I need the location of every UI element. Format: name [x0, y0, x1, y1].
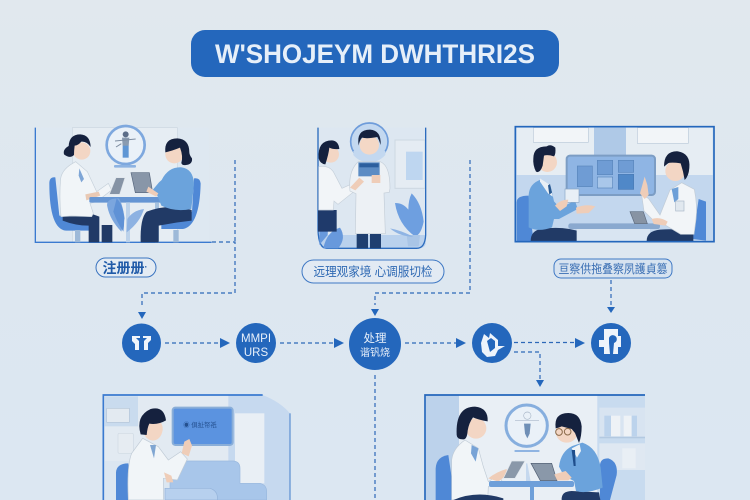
label: step 2: [302, 260, 444, 283]
arrowheads: [138, 307, 615, 387]
node 3: process: 处理: [364, 332, 387, 345]
label: step 1: ·: [144, 262, 148, 272]
flow connectors: dashed lines: [142, 160, 611, 500]
node 5: icon: [591, 323, 631, 363]
node 2: MMPI URS: [236, 323, 276, 363]
node 2: MMPI URS: URS: [244, 347, 268, 359]
title banner: [191, 30, 559, 77]
node 3: process: [349, 318, 401, 370]
node 2: MMPI URS: MMPI: [241, 333, 271, 345]
panel: scene 1 consultation: [35, 126, 212, 242]
label: step 1: [96, 258, 156, 277]
node 4: icon: [472, 323, 512, 363]
panel: scene 4 doctor at monitor: ◉ 俱扯帑祇: [183, 420, 217, 429]
panel: scene 3 doctor consultation with screen: [515, 127, 714, 242]
node 3: process: 谐钒烧: [360, 346, 390, 359]
panel: scene 2 doctor with nurse: [318, 123, 426, 248]
panel: scene 5 doctor and patient with laptops: [425, 394, 645, 500]
label: step 3: 亘察供拖叠察夙護貞篡: [558, 261, 668, 276]
label: step 1: 注册册: [102, 260, 144, 276]
title banner: W'SHOJEYM DWHTHRI2S: [215, 39, 535, 69]
label: step 2: 远理观家境 心调服切检: [314, 264, 433, 279]
label: step 3: [554, 259, 672, 278]
node 1: icon: [122, 324, 161, 362]
panel: scene 4 doctor at monitor: [103, 395, 290, 500]
